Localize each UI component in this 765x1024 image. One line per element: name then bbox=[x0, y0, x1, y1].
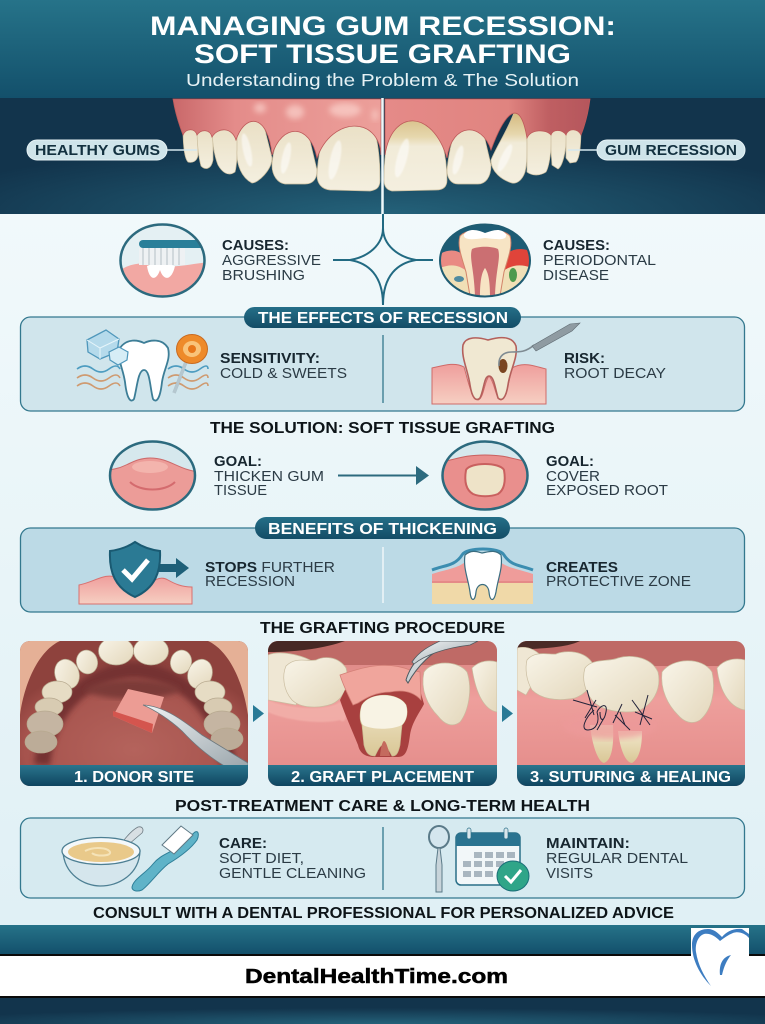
title: SOFT TISSUE GRAFTING bbox=[194, 39, 571, 69]
icon: toothbrush on gums bbox=[118, 224, 211, 300]
label: gum recession: GUM RECESSION bbox=[605, 143, 737, 159]
text: care: GENTLE CLEANING bbox=[219, 866, 366, 882]
text: care bbox=[219, 836, 366, 882]
text: cause brushing bbox=[222, 238, 321, 284]
heading: post-treatment care: POST-TREATMENT CARE & LONG-TERM HEALTH bbox=[175, 798, 590, 815]
text: cause periodontal: DISEASE bbox=[543, 268, 609, 284]
text: sensitivity: COLD & SWEETS bbox=[220, 366, 347, 382]
heading: grafting procedure: THE GRAFTING PROCEDURE bbox=[260, 620, 505, 637]
tooth highlights bbox=[240, 133, 515, 181]
icon: periodontal disease tooth bbox=[440, 224, 532, 300]
text: cause periodontal bbox=[543, 238, 656, 284]
logo: tooth bbox=[691, 928, 749, 986]
website name: DentalHealthTime.com bbox=[245, 966, 508, 988]
icon: thickened gum circle bbox=[108, 440, 196, 511]
heading pill: effects: THE EFFECTS OF RECESSION bbox=[258, 310, 508, 327]
star connector bbox=[333, 214, 433, 305]
caption: donor site bbox=[20, 765, 248, 786]
teeth comparison band bbox=[0, 98, 765, 214]
heading pill: benefits: BENEFITS OF THICKENING bbox=[268, 521, 497, 538]
caption: donor site: 1. DONOR SITE bbox=[74, 769, 194, 786]
text: goal cover bbox=[546, 454, 668, 499]
panel: effects of recession bbox=[20, 307, 744, 411]
text: goal cover: GOAL: bbox=[546, 454, 594, 470]
caption: suturing and healing bbox=[517, 765, 745, 786]
heading: the solution: THE SOLUTION: SOFT TISSUE GRAFTING bbox=[210, 420, 555, 437]
text: risk: ROOT DECAY bbox=[564, 366, 666, 382]
text: goal thicken: THICKEN GUM bbox=[214, 469, 324, 485]
text: cause brushing: CAUSES: bbox=[222, 238, 289, 254]
text: goal thicken: GOAL: bbox=[214, 454, 262, 470]
icon: soft food bowl and toothbrush bbox=[62, 826, 198, 891]
icon: covered root circle bbox=[440, 442, 530, 512]
arrow: step one to two bbox=[253, 705, 264, 722]
caption: graft placement: 2. GRAFT PLACEMENT bbox=[291, 769, 474, 786]
text: goal thicken bbox=[214, 454, 324, 499]
text: cause brushing: AGGRESSIVE bbox=[222, 253, 321, 269]
text: maintain bbox=[546, 836, 688, 882]
photo: graft placement bbox=[268, 641, 497, 786]
text: risk: RISK: bbox=[564, 351, 605, 367]
text: care: SOFT DIET, bbox=[219, 851, 304, 867]
page background bbox=[0, 214, 765, 925]
teeth row bbox=[183, 110, 581, 191]
heading pill: effects bbox=[244, 307, 521, 328]
icon: protective zone tooth bbox=[432, 549, 533, 604]
text: goal cover: COVER bbox=[546, 469, 600, 485]
icon: dental mirror and calendar bbox=[429, 826, 529, 892]
gums: healthy side bbox=[173, 99, 381, 158]
caption: graft placement bbox=[268, 765, 497, 786]
text: cause periodontal: PERIODONTAL bbox=[543, 253, 656, 269]
icon: shield stopping recession bbox=[79, 542, 192, 604]
text: maintain: VISITS bbox=[546, 866, 593, 882]
text: stops further recession: RECESSION bbox=[205, 574, 295, 590]
text: maintain: REGULAR DENTAL bbox=[546, 851, 688, 867]
text: care: CARE: bbox=[219, 836, 267, 852]
gums: receded side bbox=[385, 99, 590, 158]
text: stops further recession bbox=[205, 560, 335, 590]
heading pill: benefits bbox=[255, 517, 510, 539]
icon: sensitive tooth with ice and lollipop bbox=[77, 330, 208, 401]
photo: donor site bbox=[20, 637, 248, 786]
icon: root decay tooth with probe bbox=[432, 323, 580, 404]
text: stops further recession: STOPS FURTHER bbox=[205, 560, 335, 576]
text: creates protective zone: CREATES bbox=[546, 560, 618, 576]
text: risk bbox=[564, 351, 666, 382]
text: maintain: MAINTAIN: bbox=[546, 836, 630, 852]
label: healthy gums: HEALTHY GUMS bbox=[35, 143, 160, 159]
text: cause brushing: BRUSHING bbox=[222, 268, 305, 284]
caption: suturing and healing: 3. SUTURING & HEALING bbox=[530, 769, 731, 786]
gum highlights bbox=[254, 103, 378, 121]
text: sensitivity: SENSITIVITY: bbox=[220, 351, 320, 367]
text: cause periodontal: CAUSES: bbox=[543, 238, 610, 254]
panel: post-treatment care bbox=[20, 818, 744, 898]
text: sensitivity bbox=[220, 351, 347, 382]
text: goal cover: EXPOSED ROOT bbox=[546, 483, 668, 499]
text: goal thicken: TISSUE bbox=[214, 483, 267, 499]
text: creates protective zone bbox=[546, 560, 691, 590]
subtitle: Understanding the Problem & The Solution bbox=[186, 70, 579, 90]
panel: benefits of thickening bbox=[20, 517, 744, 612]
header banner bbox=[0, 0, 765, 98]
label: healthy gums bbox=[27, 140, 197, 160]
arrow: thicken to cover bbox=[338, 466, 429, 485]
text: creates protective zone: PROTECTIVE ZONE bbox=[546, 574, 691, 590]
title bbox=[150, 11, 616, 69]
centre divider bbox=[381, 98, 384, 214]
title: MANAGING GUM RECESSION: bbox=[150, 11, 616, 41]
photo: suturing and healing bbox=[517, 641, 745, 786]
footer bbox=[0, 925, 765, 1024]
consult advice line: CONSULT WITH A DENTAL PROFESSIONAL FOR PERSONALIZED ADVICE bbox=[93, 905, 674, 922]
label: gum recession bbox=[568, 140, 745, 160]
arrow: step two to three bbox=[502, 705, 513, 722]
